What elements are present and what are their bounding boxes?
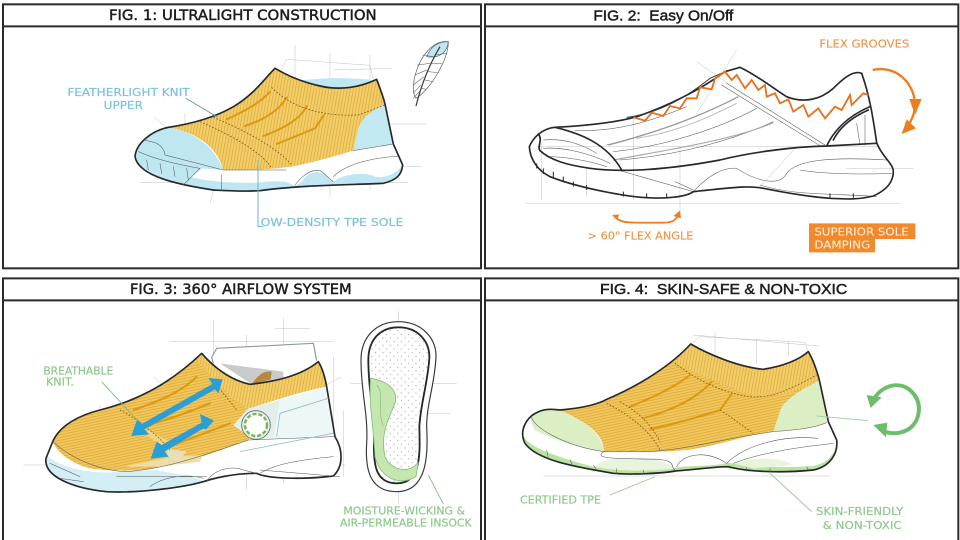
- callout: superior sole damping: SUPERIOR SOLE: [814, 226, 909, 239]
- callout: breathable knit: BREATHABLE: [43, 364, 113, 377]
- panel 3 frame: [3, 278, 481, 540]
- icon: circular arrows: [817, 385, 919, 437]
- panel: fig 2 easy on/off: [485, 4, 958, 268]
- callout: featherlight knit upper: UPPER: [104, 99, 143, 112]
- panel: fig 3 360 airflow system: [3, 278, 481, 540]
- callout: low-density TPE sole: OW-DENSITY TPE SOLE: [261, 216, 403, 229]
- heading: fig 1: FIG. 1: ULTRALIGHT CONSTRUCTION: [109, 8, 377, 24]
- callout: moisture-wicking insock: AIR-PERMEABLE INSOCK: [340, 516, 472, 529]
- callout: breathable knit: KNIT.: [46, 375, 74, 388]
- flex grooves zigzag: [633, 72, 868, 121]
- shoe illustration: ultralight: [135, 45, 427, 203]
- panel 4 heading rule: [485, 297, 958, 303]
- callout: moisture-wicking insock: [340, 475, 472, 529]
- panel 2 heading rule: [485, 23, 958, 29]
- icon: vent circle: [242, 411, 270, 439]
- arrow: airflow upper: [131, 378, 223, 436]
- icon: feather: [413, 42, 448, 106]
- label: flex angle: > 60° FLEX ANGLE: [588, 229, 693, 242]
- callout: low-density TPE sole: [258, 160, 403, 229]
- panel: fig 1 ultralight construction: [3, 4, 481, 268]
- callout: skin-friendly and non-toxic: SKIN-FRIENDLY: [816, 505, 904, 518]
- arrow: curved flex arrow: [873, 69, 922, 134]
- shoe illustration: airflow: [23, 318, 345, 492]
- callout: featherlight knit upper: FEATHERLIGHT KNIT: [67, 86, 190, 99]
- label: flex grooves: FLEX GROOVES: [819, 38, 909, 51]
- panel 1 heading rule: [3, 23, 481, 29]
- callout: breathable knit: [43, 364, 138, 422]
- callout: skin-friendly and non-toxic: [770, 473, 904, 532]
- panel: fig 4 skin-safe and non-toxic: [485, 278, 958, 540]
- callout: certified TPE: [520, 477, 655, 507]
- callout: superior sole damping: [809, 223, 915, 252]
- shoe illustration: line drawing: [525, 50, 913, 213]
- callout: moisture-wicking insock: MOISTURE-WICKING &: [343, 504, 465, 517]
- panel 2 frame: [485, 4, 958, 268]
- heading: fig 3: FIG. 3: 360° AIRFLOW SYSTEM: [130, 282, 352, 298]
- callout: featherlight knit upper: [67, 86, 217, 117]
- arrow: airflow lower: [151, 414, 214, 459]
- heading: fig 2: FIG. 2: Easy On/Off: [593, 8, 733, 24]
- panel 3 heading rule: [3, 297, 481, 303]
- heading: fig 4: FIG. 4: SKIN-SAFE & NON-TOXIC: [600, 282, 847, 298]
- panel 4 frame: [485, 278, 958, 540]
- shoe illustration: skin-safe: [523, 332, 837, 476]
- callout: superior sole damping: DAMPING: [814, 239, 870, 252]
- callout: certified TPE: CERTIFIED TPE: [520, 494, 601, 507]
- callout: skin-friendly and non-toxic: & NON-TOXIC: [823, 519, 902, 532]
- insock illustration: [350, 310, 457, 503]
- panel 1 frame: [3, 4, 481, 268]
- arrow: flex angle: [612, 211, 681, 223]
